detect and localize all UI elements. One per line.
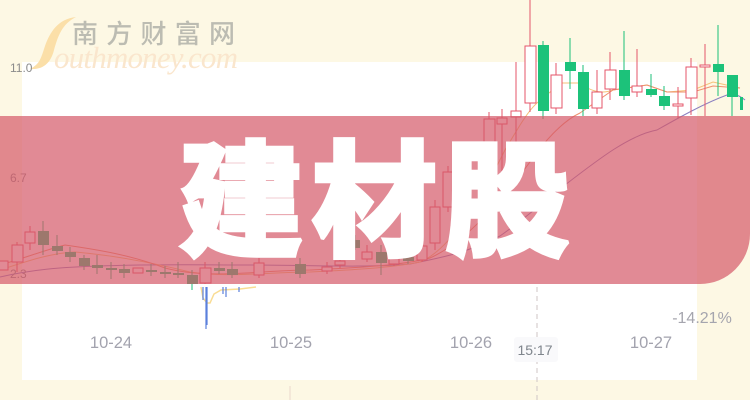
x axis date labels xyxy=(90,334,672,352)
y axis labels: 11.0 xyxy=(10,61,33,75)
indicator spikes below chart xyxy=(201,287,256,329)
y axis labels: 6.7 xyxy=(10,171,27,185)
y axis labels xyxy=(10,61,33,281)
green candle wicks xyxy=(43,25,732,290)
crosshair dashed line xyxy=(536,287,538,400)
watermark logo: southmoney xyxy=(30,14,238,75)
x axis date labels: 10-27 xyxy=(630,334,672,352)
red hollow candle bodies xyxy=(0,46,710,283)
time tooltip: 15:17 xyxy=(517,342,553,358)
chart panel xyxy=(22,62,697,380)
watermark logo: southmoney: outhmoney.com xyxy=(54,40,238,75)
candlestick chart xyxy=(0,0,745,290)
green candle bodies xyxy=(38,45,743,284)
moving average lines xyxy=(0,82,745,277)
y axis labels: 2.3 xyxy=(10,267,27,281)
x axis date labels: 10-24 xyxy=(90,334,132,352)
title: 建材股 xyxy=(179,101,578,282)
red candle wicks xyxy=(17,0,705,284)
tick mark below chart xyxy=(289,386,291,400)
time tooltip xyxy=(514,337,558,362)
pink title band xyxy=(0,116,750,284)
x axis date labels: 10-26 xyxy=(450,334,492,352)
percent label: -14.21% xyxy=(672,310,732,327)
x axis date labels: 10-25 xyxy=(270,334,312,352)
watermark logo: southmoney: 南方财富网 xyxy=(72,14,235,51)
